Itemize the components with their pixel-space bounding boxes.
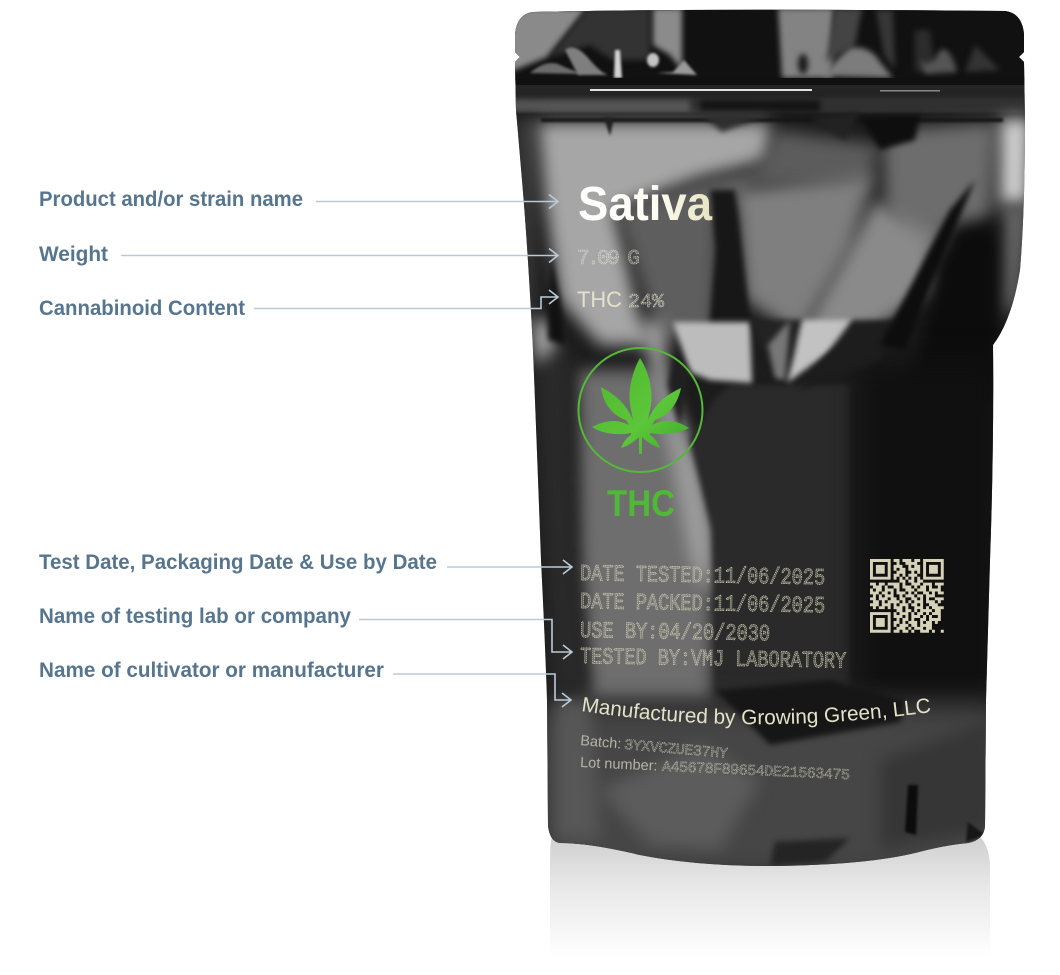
weight: 7.09 G [577, 248, 640, 271]
manufacturer line: Manufactured by Growing Green, LLC [582, 697, 930, 728]
dates and lab block: TESTED BY:VMJ LABORATORY [580, 644, 846, 675]
callout: test, packaging and use by dates: Test Date, Packaging Date & Use by Date [39, 551, 437, 574]
lot number: Lot number: [580, 755, 658, 775]
QR code [870, 560, 944, 631]
cannabinoid content: THC [577, 287, 622, 312]
dates and lab block [580, 561, 846, 675]
top seal shading [515, 10, 1025, 119]
front panel highlights [515, 112, 1030, 880]
bag reflection [550, 835, 990, 957]
product name: Sativa [578, 178, 712, 231]
callout: weight [39, 243, 558, 266]
callout: product and/or strain name: Product and/or strain name [39, 188, 303, 211]
callout: weight: Weight [39, 243, 108, 266]
callout: cultivator or manufacturer: Name of cultivator or manufacturer [39, 659, 384, 682]
batch number: Batch: [580, 733, 622, 753]
cannabinoid content: 24% [628, 291, 665, 313]
callout: cannabinoid content: Cannabinoid Content [39, 297, 245, 320]
callout: product and/or strain name [39, 188, 558, 211]
dates and lab block: DATE TESTED:11/06/2025 [580, 561, 825, 591]
lot number: A45678F89654DE21563475 [662, 759, 850, 784]
dates and lab block: DATE PACKED:11/06/2025 [580, 589, 825, 619]
lot number [581, 757, 850, 780]
callout: cannabinoid content [39, 290, 558, 320]
callout: testing lab or company [39, 605, 572, 659]
callout: cultivator or manufacturer [39, 659, 571, 707]
THC green label: THC [607, 483, 675, 524]
dates and lab block: USE BY:04/20/2030 [580, 618, 770, 647]
foil pouch [515, 10, 1025, 866]
icon: THC cannabis leaf badge [578, 348, 702, 472]
batch number [581, 735, 728, 758]
cannabinoid content [578, 292, 664, 308]
batch number: 3YXVCZUE37HY [623, 737, 728, 763]
callout: testing lab or company: Name of testing lab or company [39, 605, 351, 628]
